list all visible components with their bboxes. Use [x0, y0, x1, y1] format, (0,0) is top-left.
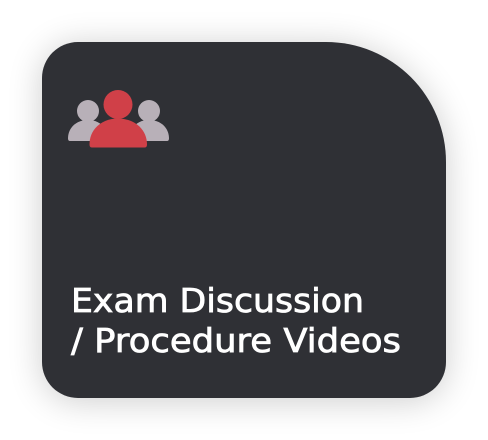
icon: left person: [68, 100, 108, 141]
title: [71, 282, 401, 360]
panel: dark rounded card: [42, 42, 446, 398]
title: Exam Discussion: [71, 282, 364, 320]
icon: group of three people: [68, 90, 169, 148]
icon: center person: [90, 90, 147, 148]
icon: right person: [129, 100, 169, 141]
title: / Procedure Videos: [71, 322, 401, 360]
